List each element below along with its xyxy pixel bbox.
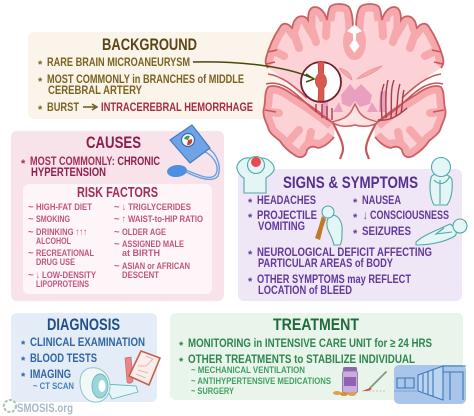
arrow: aneurysm pointer bbox=[193, 62, 314, 82]
risk factors left column: ↓ LOW-DENSITY bbox=[36, 270, 96, 281]
symptoms text: * bbox=[248, 212, 253, 224]
symptoms text: SEIZURES bbox=[362, 224, 411, 238]
lateral ventricles bbox=[339, 66, 382, 80]
icon: CT scanner bbox=[80, 368, 138, 402]
symptoms text: HEADACHES bbox=[257, 193, 316, 207]
background bullet points: RARE BRAIN MICROANEURYSM bbox=[47, 55, 190, 69]
causes text: * bbox=[21, 158, 26, 170]
risk factors left column: RECREATIONAL bbox=[36, 248, 94, 259]
risk factors right column: at BIRTH bbox=[122, 248, 160, 259]
risk factors left column: SMOKING bbox=[36, 214, 70, 225]
risk factors left column: ~ bbox=[28, 214, 34, 225]
causes text: HYPERTENSION bbox=[31, 165, 106, 179]
risk factors right column: ↑ WAIST-to-HIP RATIO bbox=[122, 214, 203, 225]
symptoms text: * bbox=[353, 212, 358, 224]
treatment text: * bbox=[179, 356, 184, 368]
risk factors left column: ALCOHOL bbox=[36, 236, 71, 247]
risk factors right column: ~ bbox=[114, 261, 120, 272]
symptoms text: OTHER SYMPTOMS may REFLECT bbox=[257, 272, 412, 286]
background bullet points: * bbox=[38, 104, 43, 116]
symptoms text: LOCATION of BLEED bbox=[258, 283, 352, 297]
diagnosis text: IMAGING bbox=[30, 367, 71, 381]
logo: osmosis.org bbox=[4, 400, 73, 415]
risk factors right column: ASIAN or AFRICAN bbox=[122, 261, 190, 272]
background bullet points: INTRACEREBRAL HEMORRHAGE bbox=[101, 100, 253, 114]
treatment text: ~ MECHANICAL VENTILATION bbox=[191, 365, 305, 375]
icon: blood pressure cuff bbox=[166, 125, 219, 179]
risk factors right column: ~ bbox=[114, 239, 120, 250]
risk factors left column: HIGH-FAT DIET bbox=[36, 202, 92, 213]
heading: causes: CAUSES bbox=[86, 133, 141, 152]
diagnosis text: * bbox=[21, 371, 26, 383]
treatment text bbox=[179, 336, 432, 396]
icon: person lying down bbox=[416, 219, 467, 245]
panel: background bbox=[28, 32, 285, 119]
diagnosis text: CLINICAL EXAMINATION bbox=[30, 335, 145, 349]
symptoms text: * bbox=[248, 249, 253, 261]
risk factors right column: ~ bbox=[114, 227, 120, 238]
symptoms text: * bbox=[248, 197, 253, 209]
risk factors left column: DRUG USE bbox=[36, 257, 75, 268]
risk factors right column: OLDER AGE bbox=[122, 227, 166, 238]
treatment text: OTHER TREATMENTS to STABILIZE INDIVIDUAL bbox=[188, 352, 415, 366]
background bullet points: * bbox=[38, 76, 43, 88]
causes text: MOST COMMONLY: CHRONIC bbox=[30, 154, 160, 168]
risk factors left column bbox=[28, 202, 96, 290]
brainstem and vessels bbox=[332, 104, 378, 126]
icon: clipboard bbox=[125, 351, 160, 385]
background bullet points: MOST COMMONLY in BRANCHES of MIDDLE bbox=[47, 72, 244, 86]
symptoms text: PARTICULAR AREAS of BODY bbox=[258, 256, 393, 270]
symptoms text: NEUROLOGICAL DEFICIT AFFECTING bbox=[257, 245, 432, 259]
risk factors left column: LIPOPROTEINS bbox=[36, 279, 89, 290]
heading: signs and symptoms: SIGNS & SYMPTOMS bbox=[283, 173, 418, 192]
treatment text: * bbox=[179, 340, 184, 352]
midline fissure bbox=[348, 4, 361, 52]
heading: treatment: TREATMENT bbox=[273, 315, 360, 334]
icon: hospital corridor bbox=[394, 365, 466, 404]
heading: risk factors: RISK FACTORS bbox=[77, 185, 158, 201]
risk factors right column bbox=[114, 202, 203, 281]
risk factors right column: DESCENT bbox=[122, 270, 159, 281]
symptoms text: * bbox=[353, 228, 358, 240]
logo: osmosis.org: SMOSIS.org bbox=[17, 401, 73, 415]
diagnosis text: ~ CT SCAN bbox=[33, 381, 74, 391]
icon: scalpel bbox=[362, 372, 386, 391]
icon: person with headache bbox=[237, 156, 274, 193]
symptoms text: * bbox=[248, 276, 253, 288]
striate arteries bbox=[316, 80, 407, 120]
risk factors left column: ~ bbox=[28, 248, 34, 259]
illustration: brain cross section bbox=[263, 4, 446, 159]
risk factors right column: ↓ TRIGLYCERIDES bbox=[122, 202, 191, 213]
treatment text: ~ ANTIHYPERTENSIVE MEDICATIONS bbox=[191, 376, 331, 386]
risk factors right column: ~ bbox=[114, 202, 120, 213]
background bullet points: CEREBRAL ARTERY bbox=[48, 83, 142, 97]
risk factors left column: ~ bbox=[28, 202, 34, 213]
panel: causes bbox=[11, 125, 224, 301]
symptoms text: NAUSEA bbox=[362, 193, 401, 207]
causes text bbox=[21, 154, 160, 179]
risk factors left column: DRINKING ↑↑↑ bbox=[36, 227, 87, 238]
diagnosis text: BLOOD TESTS bbox=[30, 351, 97, 365]
panel: risk factors bbox=[23, 184, 212, 294]
background bullet points: * bbox=[38, 59, 43, 71]
panel: signs and symptoms bbox=[237, 156, 467, 301]
risk factors left column: ~ bbox=[28, 270, 34, 281]
icon: pill bottle and pills bbox=[333, 367, 358, 396]
symptoms text bbox=[248, 193, 449, 297]
panel: diagnosis bbox=[11, 313, 160, 402]
basal ganglia bbox=[322, 84, 387, 115]
risk factors right column: ASSIGNED MALE bbox=[122, 239, 184, 250]
diagnosis text: * bbox=[21, 339, 26, 351]
diagnosis text bbox=[21, 335, 145, 391]
icon: person vomiting bbox=[315, 206, 342, 245]
heading: diagnosis: DIAGNOSIS bbox=[47, 315, 120, 334]
panel: treatment bbox=[170, 313, 466, 404]
symptoms text: PROJECTILE bbox=[257, 208, 317, 222]
zoom circle: microaneurysm bbox=[301, 62, 341, 102]
symptoms text: * bbox=[353, 197, 358, 209]
risk factors left column: ~ bbox=[28, 227, 34, 238]
treatment text: ~ SURGERY bbox=[191, 386, 234, 396]
background bullet points bbox=[38, 55, 253, 116]
icon: person curled up bbox=[430, 158, 452, 205]
symptoms text: VOMITING bbox=[258, 219, 305, 233]
diagnosis text: * bbox=[21, 355, 26, 367]
background bullet points: BURST bbox=[47, 100, 80, 114]
heading: background: BACKGROUND bbox=[102, 35, 197, 54]
risk factors right column: ~ bbox=[114, 214, 120, 225]
